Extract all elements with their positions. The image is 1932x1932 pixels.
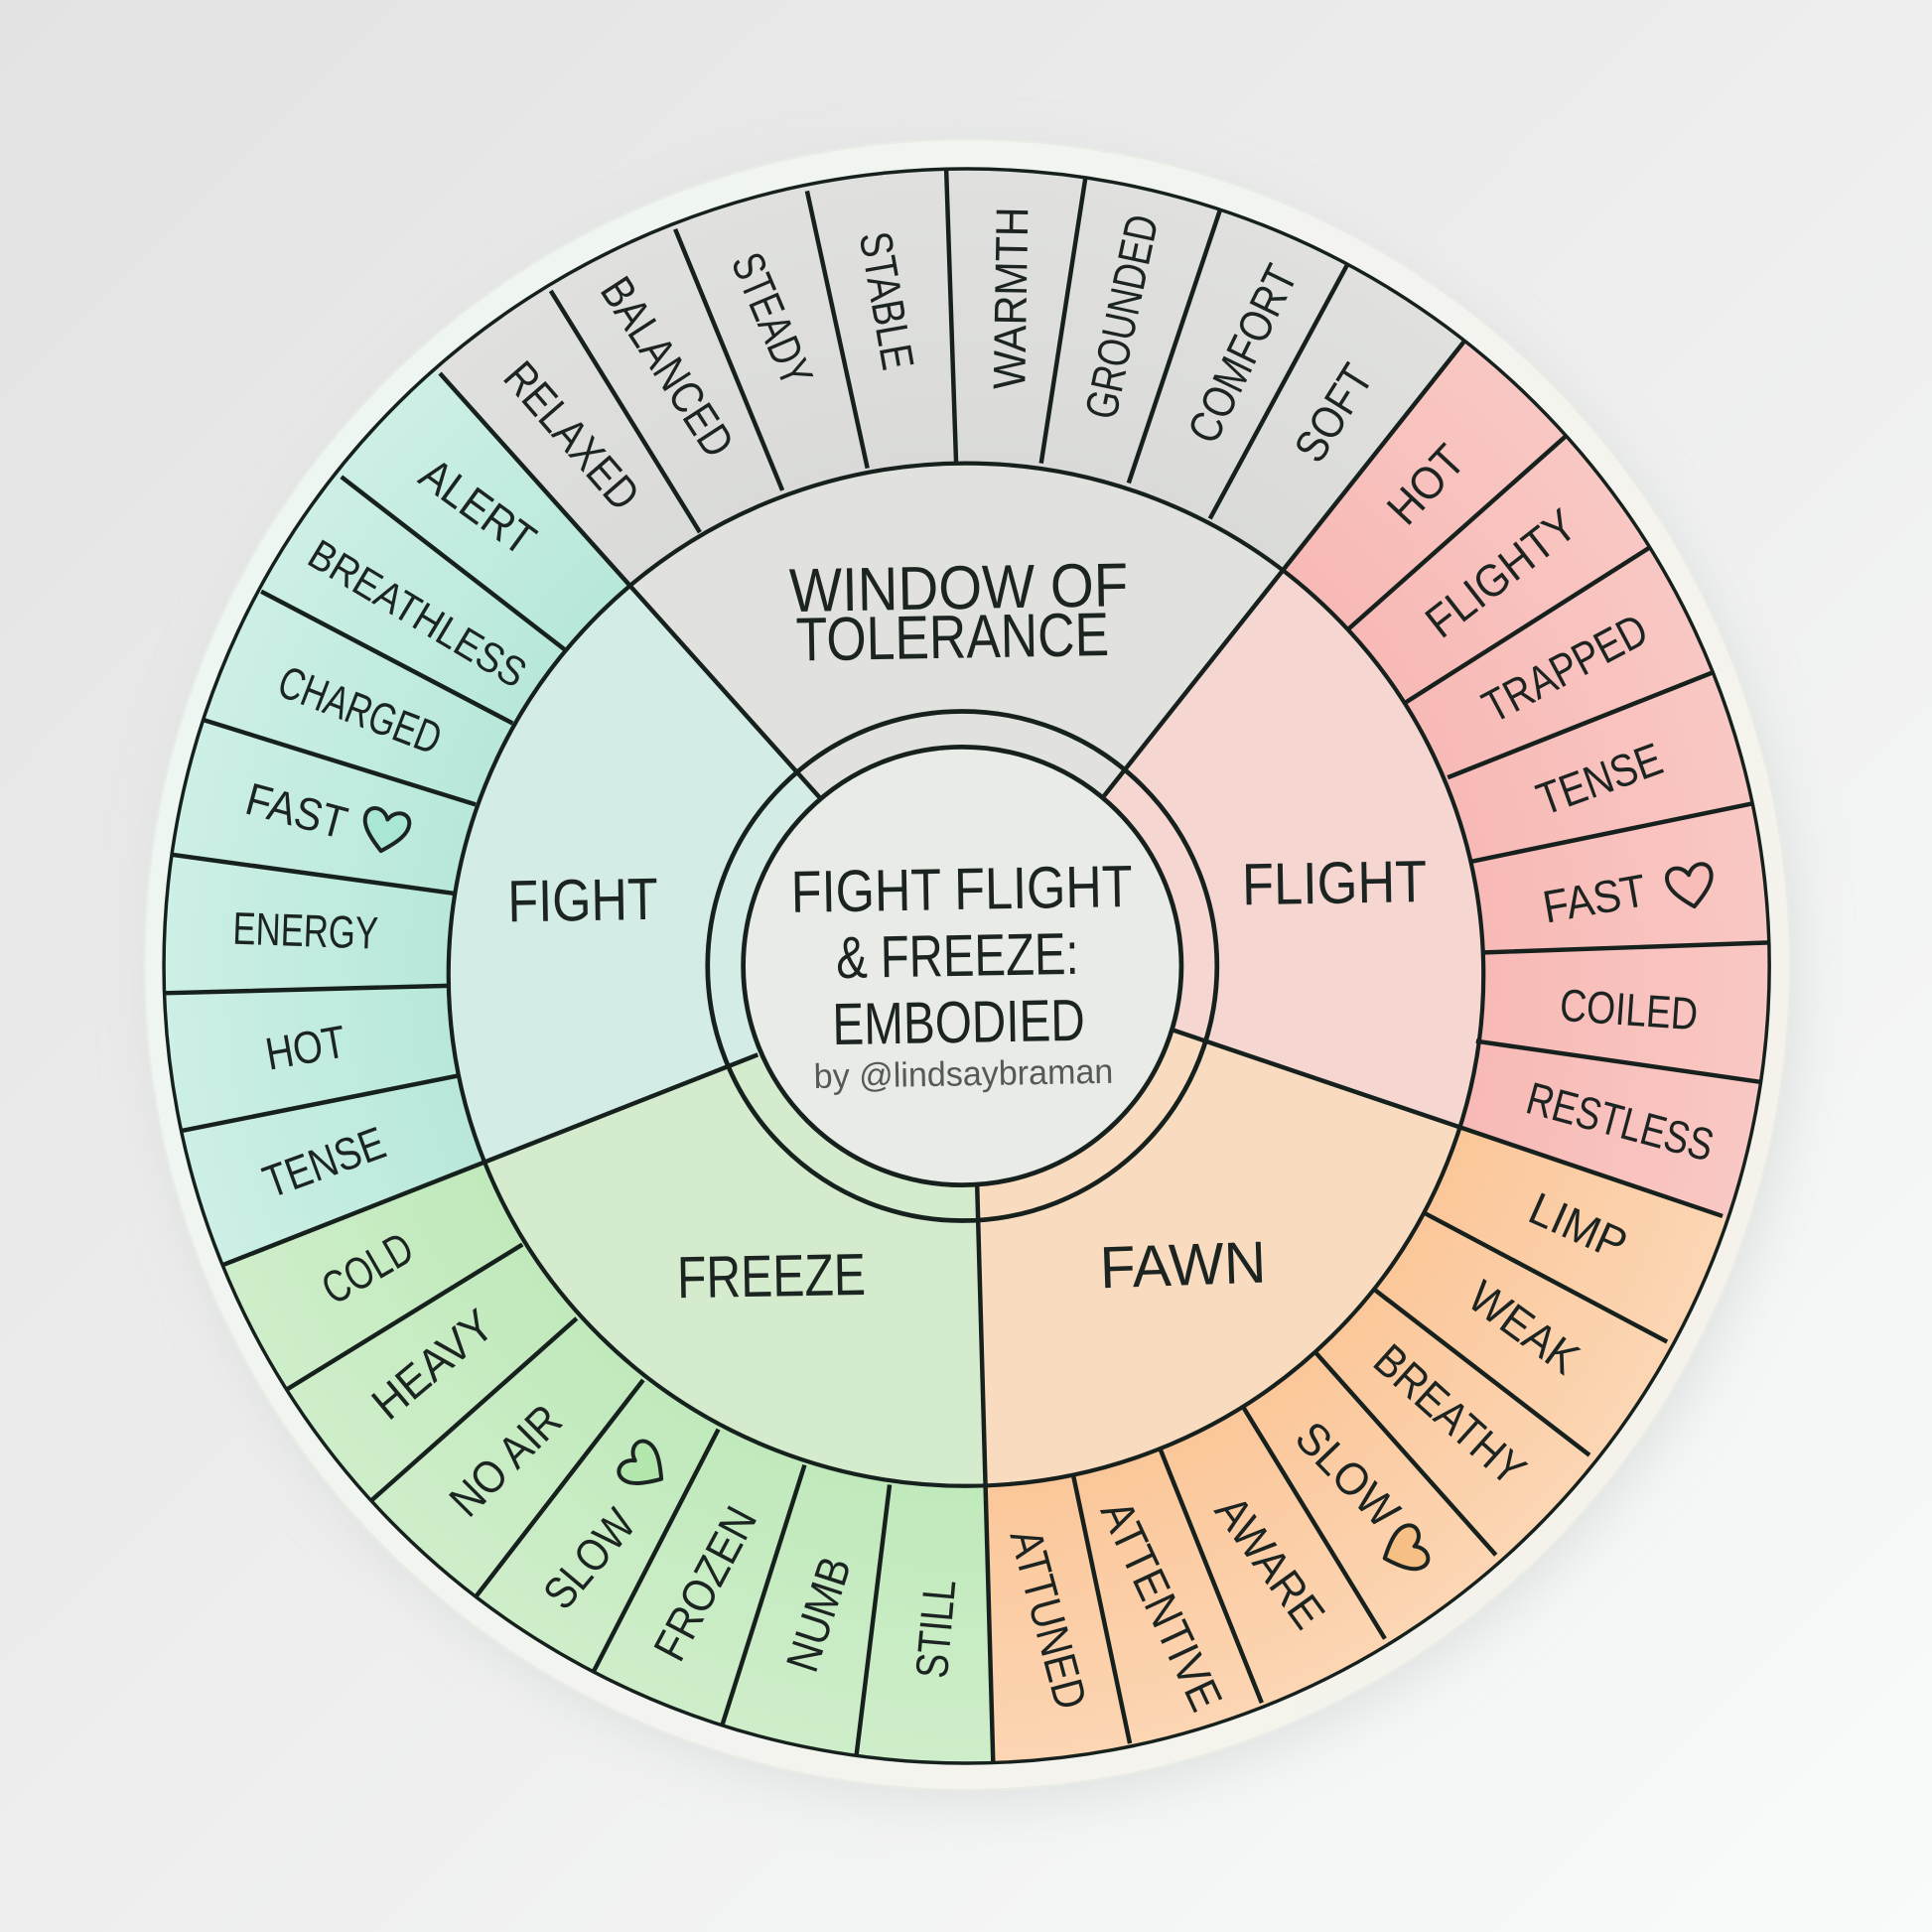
wheel (162, 167, 1771, 1765)
title: EMBODIED (832, 987, 1085, 1057)
labels: fight: HOT (262, 1015, 349, 1080)
labels: fight: FAST (240, 772, 352, 849)
category labels: FLIGHT (1241, 848, 1428, 917)
category labels: TOLERANCE (795, 601, 1110, 674)
labels: window of tolerance: SOFT (1284, 354, 1383, 471)
labels: freeze: STILL (905, 1578, 965, 1680)
plate (144, 139, 1790, 1790)
labels: window of tolerance: COMFORT (1177, 256, 1308, 451)
labels: flight: RESTLESS (1521, 1071, 1720, 1172)
category labels: FAWN (1099, 1229, 1267, 1301)
labels: flight: FLIGHTY (1416, 498, 1587, 647)
labels: flight: TRAPPED (1474, 604, 1656, 733)
icon: flight heart (1665, 863, 1717, 910)
labels: freeze: SLOW (533, 1498, 645, 1618)
labels: flight: COILED (1559, 979, 1700, 1039)
category labels (507, 551, 1428, 1311)
labels: window of tolerance (494, 207, 1383, 520)
labels: freeze: NUMB (775, 1551, 861, 1678)
labels: fawn: ATTUNED (1000, 1524, 1098, 1715)
labels: window of tolerance: GROUNDED (1074, 210, 1169, 423)
labels: fawn: WEAK (1459, 1270, 1589, 1384)
title: & FREEZE: (836, 920, 1079, 991)
labels: freeze: NO AIR (439, 1394, 572, 1526)
labels: fight: ALERT (410, 448, 545, 566)
labels: window of tolerance: STEADY (722, 245, 823, 393)
labels: fawn: LIMP (1522, 1182, 1635, 1270)
plate shadow (153, 157, 1799, 1803)
labels: fight: TENSE (256, 1116, 392, 1208)
spokes (164, 170, 1769, 1762)
title: FIGHT FLIGHT (790, 853, 1133, 925)
labels: fawn: BREATHY (1364, 1333, 1536, 1495)
category labels: WINDOW OF (788, 551, 1129, 625)
labels: fight: ENERGY (232, 902, 379, 959)
labels: freeze: HEAVY (361, 1299, 503, 1430)
labels: window of tolerance: RELAXED (494, 351, 650, 520)
labels: fawn: AWARE (1205, 1486, 1335, 1638)
labels: fawn (1000, 1182, 1635, 1719)
labels: flight: FAST (1539, 864, 1650, 933)
labels: window of tolerance: STABLE (850, 227, 924, 373)
title: by @lindsaybraman (813, 1053, 1114, 1096)
labels: fight: CHARGED (271, 655, 449, 764)
rings (164, 169, 1769, 1763)
labels: fawn: ATTENTIVE (1091, 1492, 1233, 1719)
labels: fight (232, 448, 545, 1208)
middle band colours (451, 574, 1481, 1483)
centre circle (744, 747, 1181, 1185)
labels: flight: TENSE (1530, 733, 1669, 825)
labels: flight: HOT (1377, 434, 1475, 534)
labels: flight (1377, 434, 1720, 1172)
category labels: FREEZE (676, 1241, 866, 1311)
labels: window of tolerance: BALANCED (591, 267, 745, 466)
title (790, 853, 1133, 1096)
icon: freeze heart (616, 1438, 674, 1497)
labels: fight: BREATHLESS (301, 530, 534, 697)
labels: freeze: FROZEN (643, 1498, 766, 1669)
outer band colours (165, 171, 1767, 1761)
category labels: FIGHT (507, 866, 658, 934)
labels: fawn: SLOW (1286, 1411, 1411, 1538)
icon: fawn heart (1376, 1522, 1431, 1579)
labels: freeze: COLD (313, 1221, 422, 1314)
labels: freeze (313, 1221, 965, 1680)
icon: fight heart (359, 806, 411, 856)
labels: window of tolerance: WARMTH (983, 207, 1037, 390)
